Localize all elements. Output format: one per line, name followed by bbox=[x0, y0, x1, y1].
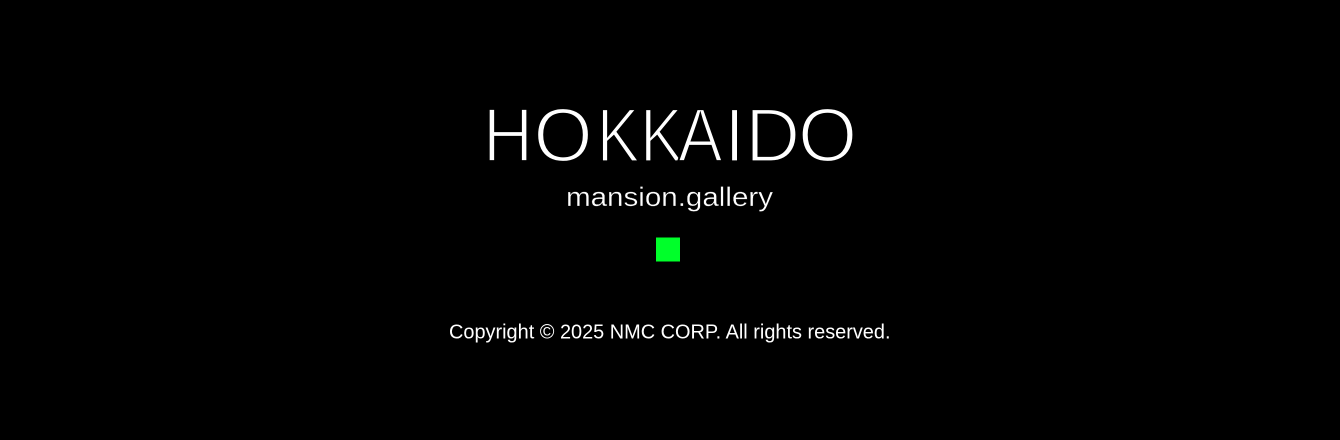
logo title: HOKKAIDO: O bbox=[534, 94, 593, 178]
icon: green square bbox=[656, 238, 680, 262]
logo title: HOKKAIDO: O bbox=[798, 94, 857, 178]
logo subtitle: mansion.gallery: mansion.gallery bbox=[566, 182, 774, 212]
logo title: HOKKAIDO: K bbox=[597, 94, 640, 178]
copyright notice: Copyright © 2025 NMC CORP. All rights reserved. bbox=[449, 322, 890, 344]
logo title: HOKKAIDO: H bbox=[483, 94, 533, 178]
logo title: HOKKAIDO: K bbox=[640, 94, 683, 178]
logo title: HOKKAIDO: A bbox=[678, 94, 723, 178]
logo title: HOKKAIDO: D bbox=[745, 94, 800, 178]
logo title: HOKKAIDO: I bbox=[724, 94, 745, 178]
